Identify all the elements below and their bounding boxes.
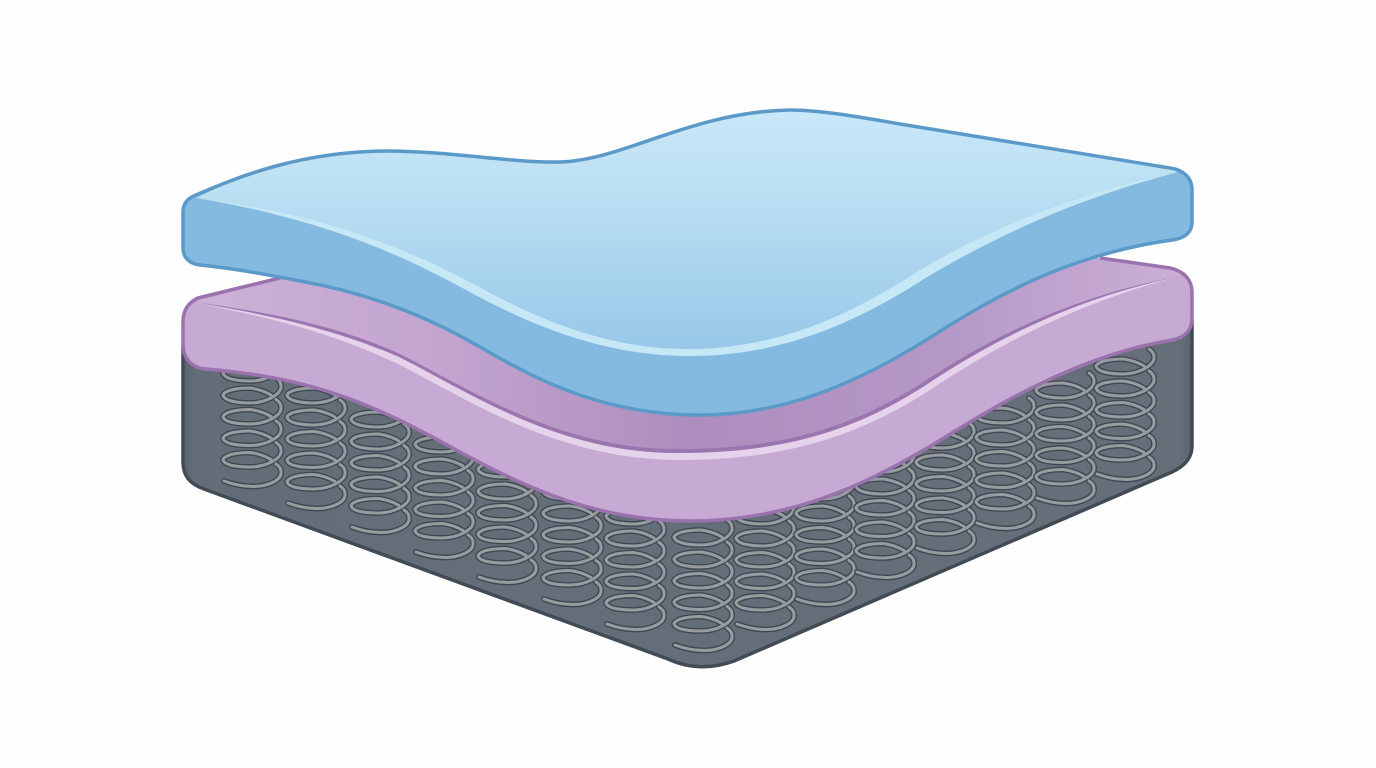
- purple foam crease line: [200, 277, 1177, 453]
- blue foam edge highlight: [196, 172, 1178, 356]
- blue foam outline: [183, 110, 1192, 415]
- blue foam front face: [183, 110, 1192, 415]
- spring base casing: [183, 320, 1192, 667]
- blue foam top surface: [196, 110, 1178, 349]
- purple foam top surface: [198, 258, 1180, 451]
- purple foam crease highlight: [200, 277, 1177, 460]
- layer: blue memory foam: [183, 110, 1192, 415]
- coil springs: [223, 349, 1154, 650]
- layer: pocket spring base: [183, 320, 1192, 667]
- layer: purple comfort foam: [183, 258, 1192, 521]
- purple foam outline: [183, 258, 1192, 521]
- purple foam front face: [183, 258, 1192, 521]
